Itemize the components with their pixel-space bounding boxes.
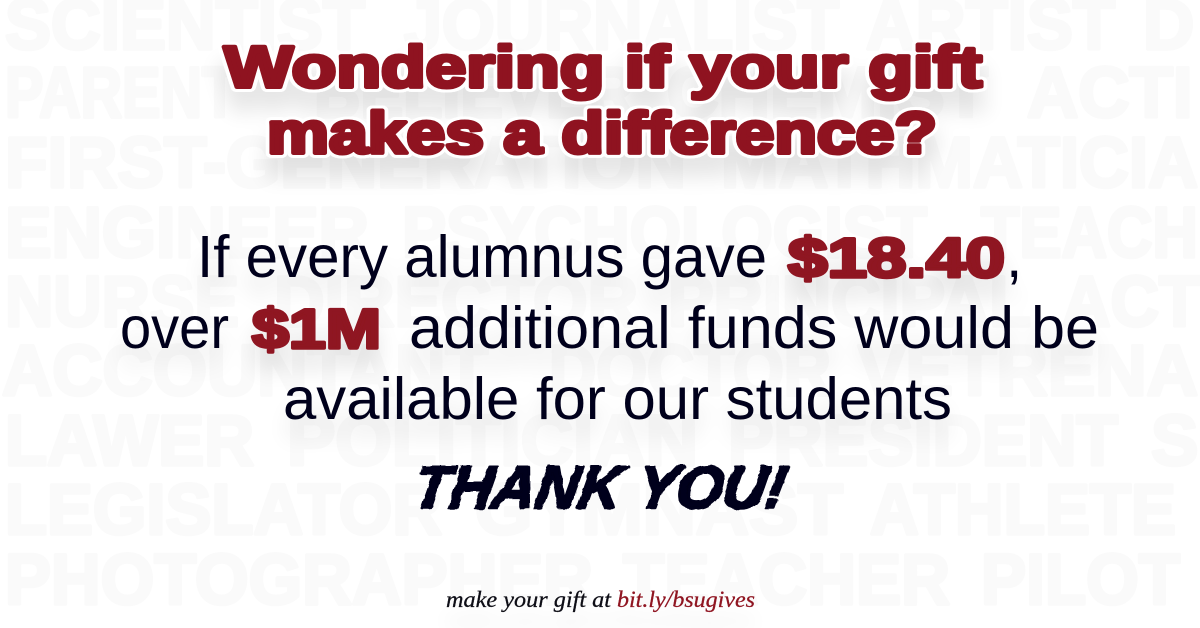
background word pattern: PARENT [5,54,237,133]
body text: over [120,295,229,361]
body text: additional funds would be [409,295,1099,361]
background word pattern: PRESIDENT [728,402,1118,481]
background word pattern: DOCTOR [549,332,831,411]
background word pattern: DIRECTOR [274,263,638,342]
background word pattern: VETRENA [858,332,1198,411]
background word pattern: S [1151,402,1198,481]
title: Wondering if your gift [224,35,982,100]
background word pattern: ACCOUNTANT [2,332,488,411]
background word pattern: GYMNAST [475,471,843,550]
background word pattern: ATHLETE [870,471,1176,550]
background word pattern: CHEMIST [667,54,988,133]
body text: , [1006,224,1022,290]
title: Wondering if your gift [224,35,982,100]
background word pattern: PHOTOGRAPHER [5,541,593,620]
footer call to action: bit.ly/bsugives [617,587,755,612]
background word pattern: PSYCHOLOGIST [402,194,927,273]
background word pattern: ENGINEER [5,194,369,273]
body text: $1M [252,297,381,360]
thank you: THANK YOU! [409,453,792,521]
background word pattern: FIRST-GENERATION [5,124,686,203]
background word pattern: MATHMATICIA [721,124,1198,203]
body text [120,224,1099,432]
title [224,35,982,166]
body text: available for our students [283,366,952,432]
footer call to action [446,587,755,612]
background word pattern: ACTI [1027,54,1193,133]
title: makes a difference? [267,101,937,166]
background word pattern: PILOT [981,541,1180,620]
background word pattern: BELIEVER [314,54,635,133]
background word pattern: NURSE [5,263,239,342]
background word pattern: TEACHER [623,541,950,620]
footer call to action: make your gift at [446,587,612,612]
background word pattern: POLITICIAN [287,402,698,481]
title: makes a difference? [267,101,937,166]
background word pattern: LAWER [5,402,254,481]
body text: $18.40 [788,226,1005,289]
background word pattern: PRINCIPAL [668,263,1031,342]
body text: If every alumnus gave [197,224,767,290]
background word pattern: LEGISLATOR [5,471,442,550]
